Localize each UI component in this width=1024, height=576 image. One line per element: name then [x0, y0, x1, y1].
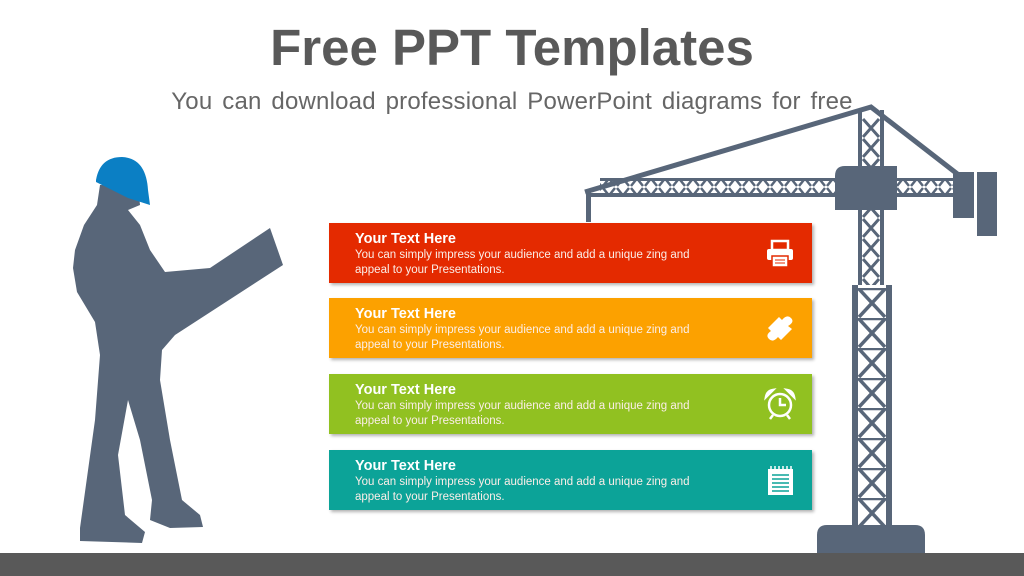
worker [73, 185, 283, 543]
bar 1: You can simply impress your audience and add a unique zing and appeal to your Presentations. [355, 249, 690, 276]
icon: printer [767, 240, 793, 266]
icon: alarm clock [764, 388, 796, 420]
title: Free PPT Templates [270, 19, 754, 76]
bar 4: You can simply impress your audience and add a unique zing and appeal to your Presentations. [355, 476, 690, 503]
subtitle: You can download professional PowerPoint diagrams for free [171, 88, 853, 115]
icon: notepad [768, 466, 793, 495]
bar 2 [329, 298, 812, 358]
bar 2: Your Text Here [355, 306, 456, 322]
helmet [96, 157, 150, 205]
bar 4: Your Text Here [355, 458, 456, 474]
bar 1: Your Text Here [355, 231, 456, 247]
bar 1 [329, 223, 812, 283]
bar 4 [329, 450, 812, 510]
bar 3: Your Text Here [355, 382, 456, 398]
icon: puzzle [767, 316, 792, 341]
bar 3 [329, 374, 812, 434]
ground [0, 553, 1024, 576]
bar 2: You can simply impress your audience and add a unique zing and appeal to your Presentations. [355, 324, 690, 351]
bar 3: You can simply impress your audience and add a unique zing and appeal to your Presentations. [355, 400, 690, 427]
